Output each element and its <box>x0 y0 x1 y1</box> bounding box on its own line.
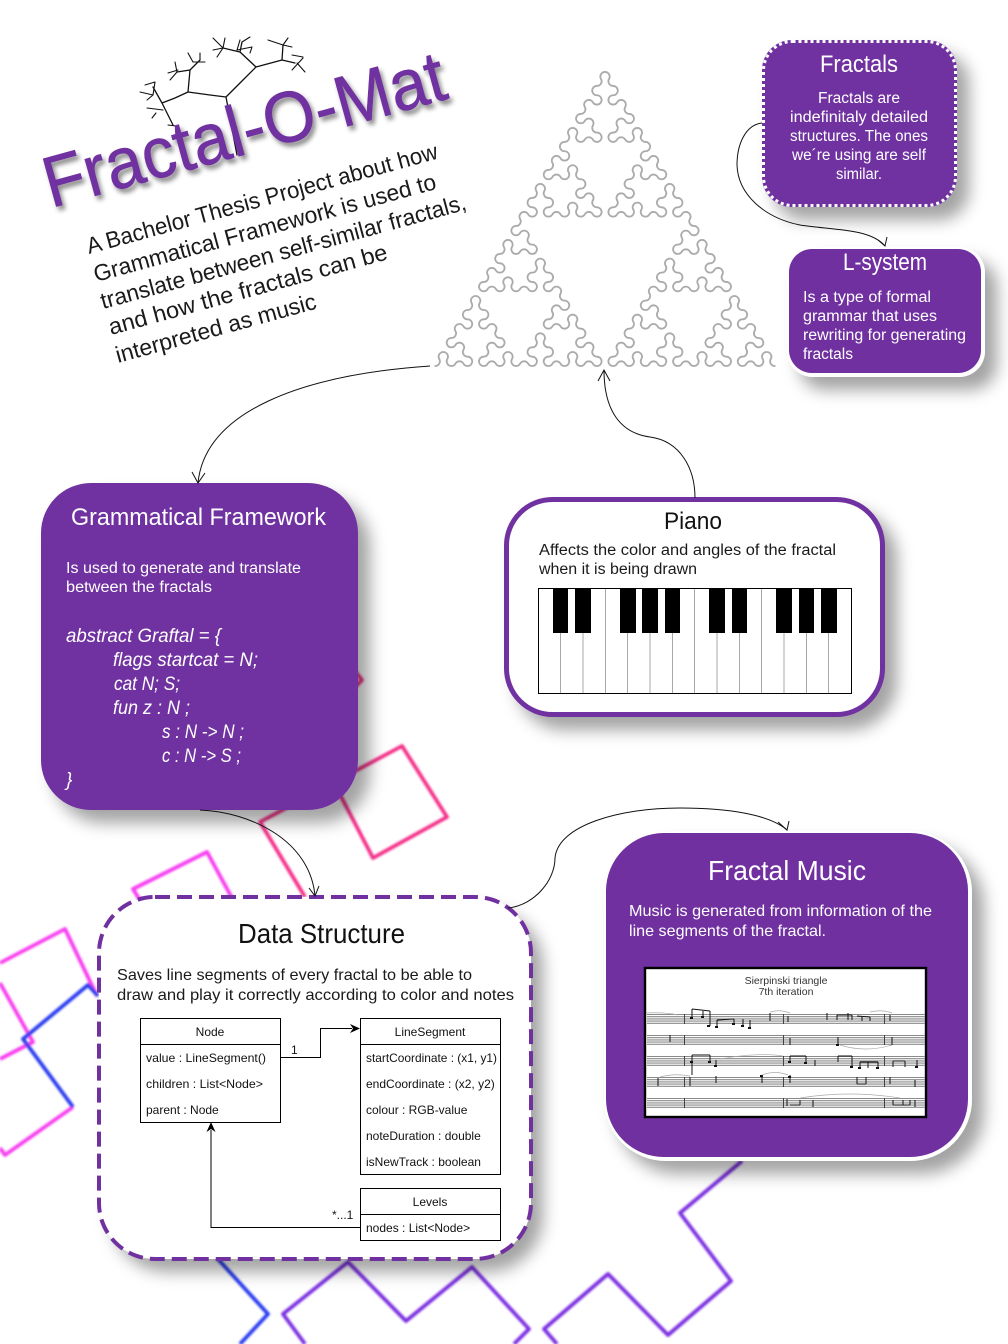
text: fractals description <box>790 90 928 183</box>
text: grammatical framework description: between the fractals <box>66 579 212 596</box>
sierpinski arrowhead fractal triangle <box>392 72 818 451</box>
arrow: node to line segment <box>281 1024 360 1058</box>
background fractal line squares <box>0 665 742 1344</box>
text: fractals description: similar. <box>836 166 882 183</box>
heading: grammatical framework: Grammatical Framework <box>71 504 327 531</box>
arrow: fractal triangle to grammatical framework <box>192 366 430 483</box>
uml class: line segment: colour : RGB-value <box>366 1103 468 1117</box>
uml class: levels <box>360 1188 500 1240</box>
panel: grammatical framework <box>41 483 358 810</box>
code sample: abstract syntax: fun z : N ; <box>113 698 190 719</box>
piano keyboard <box>538 588 852 694</box>
heading: fractals: Fractals <box>820 51 898 78</box>
uml class: node: children : List<Node> <box>146 1077 263 1091</box>
arrow: data structure to fractal music <box>508 808 789 908</box>
uml class: node <box>140 1018 280 1122</box>
text: fractals description: structures. The ones <box>790 128 928 145</box>
text: data structure description: Saves line segments of every fractal to be able to <box>117 967 472 984</box>
heading: l-system: L-system <box>843 249 927 276</box>
intro text block: translate between self-similar fractals, <box>97 189 469 314</box>
text: grammatical framework description <box>66 560 301 596</box>
title: Fractal-O-Mat <box>34 36 454 223</box>
heading: fractal music: Fractal Music <box>708 855 866 886</box>
arrow: levels to node <box>206 1122 360 1228</box>
uml class: node: value : LineSegment() <box>146 1051 266 1065</box>
uml class: line segment: LineSegment <box>395 1025 466 1039</box>
text: fractals description: we´re using are self <box>791 147 927 164</box>
arrow: piano to fractal triangle <box>598 370 695 498</box>
text: fractal music description: Music is generated from information of the <box>629 903 932 920</box>
uml class: line segment: endCoordinate : (x2, y2) <box>366 1077 495 1091</box>
panel: piano <box>506 500 882 714</box>
icon: fractal tree above the title <box>140 37 305 155</box>
text: fractal music description: line segments of the fractal. <box>629 923 826 940</box>
code sample: abstract syntax: abstract Graftal = { <box>66 626 223 647</box>
code sample: abstract syntax: cat N; S; <box>114 674 180 695</box>
code sample: abstract syntax: flags startcat = N; <box>113 650 258 671</box>
intro text block: Grammatical Framework is used to <box>90 168 439 287</box>
uml class: levels: nodes : List<Node> <box>366 1221 470 1235</box>
text: l-system description <box>803 289 966 363</box>
text: l-system description: grammar that uses <box>803 308 937 325</box>
text: data structure description <box>117 967 514 1004</box>
uml class: levels: Levels <box>413 1195 447 1209</box>
uml class: line segment: startCoordinate : (x1, y1) <box>366 1051 497 1065</box>
text: piano description <box>538 542 836 578</box>
text: fractals description: indefinitaly detailed <box>790 109 928 126</box>
text: grammatical framework description: Is used to generate and translate <box>66 560 301 577</box>
text: piano description: Affects the color and angles of the fractal <box>539 542 836 559</box>
intro text block: A Bachelor Thesis Project about how <box>83 138 441 259</box>
heading: piano: Piano <box>664 508 722 535</box>
panel: fractals <box>762 40 957 207</box>
arrow: node to line segment: 1 <box>291 1043 298 1057</box>
arrow: grammatical framework to data structure <box>200 810 319 896</box>
intro text block <box>83 138 469 368</box>
arrow: fractals to l-system <box>737 123 887 246</box>
uml class: node: parent : Node <box>146 1103 219 1117</box>
panel: l-system <box>787 247 985 377</box>
intro text block: interpreted as music <box>112 288 319 368</box>
sheet music score: Sierpinski triangle <box>745 975 828 987</box>
uml class: line segment: isNewTrack : boolean <box>366 1155 481 1169</box>
code sample: abstract syntax: } <box>64 770 73 791</box>
text: data structure description: draw and play it correctly according to color and notes <box>117 987 514 1004</box>
text: l-system description: Is a type of formal <box>803 289 931 306</box>
text: l-system description: fractals <box>803 346 853 363</box>
text: l-system description: rewriting for generating <box>803 327 966 344</box>
uml class: node: Node <box>196 1025 225 1039</box>
panel: data structure <box>99 897 531 1259</box>
text: fractal music description <box>629 903 932 940</box>
heading: data structure: Data Structure <box>238 918 405 949</box>
sheet music score: 7th iteration <box>759 986 814 998</box>
code sample: abstract syntax <box>64 626 258 791</box>
uml class: line segment: noteDuration : double <box>366 1129 481 1143</box>
text: piano description: when it is being drawn <box>538 561 697 578</box>
code sample: abstract syntax: s : N -> N ; <box>162 722 244 743</box>
uml class: line segment <box>360 1018 500 1174</box>
intro text block: and how the fractals can be <box>105 239 390 340</box>
panel: fractal music <box>604 831 972 1161</box>
text: fractals description: Fractals are <box>818 90 900 107</box>
code sample: abstract syntax: c : N -> S ; <box>162 746 241 767</box>
arrow: levels to node: *...1 <box>332 1208 354 1222</box>
sheet music score <box>645 968 926 1117</box>
